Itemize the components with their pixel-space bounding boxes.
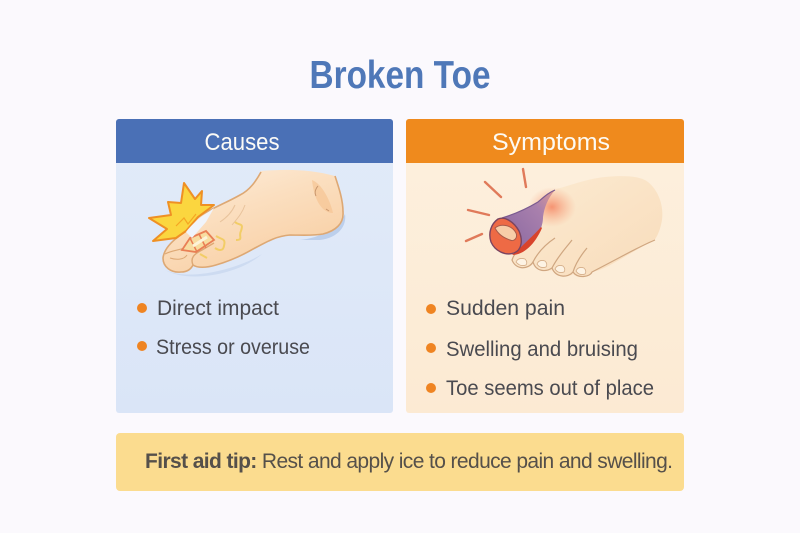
causes list bbox=[137, 297, 310, 359]
causes header bbox=[116, 119, 393, 163]
causes panel body bbox=[116, 119, 393, 413]
impact star bbox=[149, 183, 214, 241]
callout: first aid tip bbox=[116, 433, 684, 491]
toe tip bbox=[490, 218, 521, 254]
symptoms list bbox=[426, 297, 654, 400]
symptoms header bbox=[406, 119, 684, 163]
causes list: Stress or overuse bbox=[156, 336, 310, 359]
symptoms list: Swelling and bruising bbox=[446, 338, 638, 361]
swelling bbox=[528, 187, 576, 227]
symptoms header: Symptoms bbox=[492, 129, 610, 156]
pain lines bbox=[466, 169, 526, 241]
symptoms panel body bbox=[406, 119, 684, 413]
panel: causes bbox=[116, 119, 393, 413]
icon: foot with broken toe and impact star bbox=[149, 170, 345, 277]
panel: symptoms bbox=[406, 119, 684, 413]
bruised toe bbox=[501, 190, 555, 254]
icon: swollen bruised toe with pain lines bbox=[466, 169, 662, 277]
symptoms list: Sudden pain bbox=[446, 297, 565, 320]
causes header: Causes bbox=[204, 129, 280, 156]
callout: first aid tip: First aid tip: Rest and apply ice to reduce pain and swelling. bbox=[145, 450, 673, 473]
causes list: Direct impact bbox=[157, 297, 279, 320]
symptoms list: Toe seems out of place bbox=[446, 377, 654, 400]
title: Broken Toe bbox=[310, 54, 490, 97]
